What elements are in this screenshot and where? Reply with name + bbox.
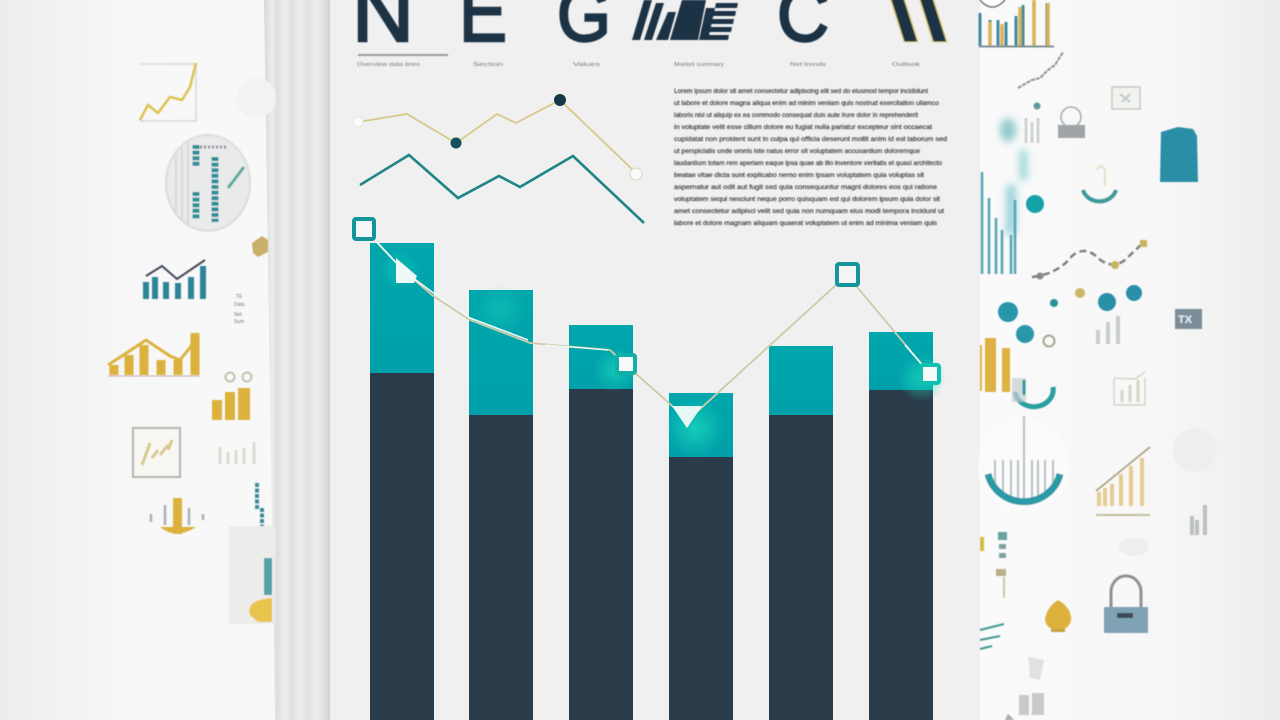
text block: body paragraph: in voluptate velit esse cillum dolore eu fugiat nulla pariatur excepteur sint occaecat bbox=[674, 124, 932, 131]
marker: square on third bar bbox=[617, 355, 635, 373]
marker: white diamond bbox=[396, 258, 417, 283]
icon: wiggly line bbox=[1018, 52, 1063, 88]
icon: faint bars bbox=[220, 442, 254, 464]
icon: striped title glyph bbox=[632, 0, 738, 40]
text block: body paragraph: ut perspiciatis unde omnis iste natus error sit voluptatem accusantium doloremque bbox=[674, 148, 920, 155]
text block: body paragraph bbox=[674, 88, 947, 227]
small caption text: Net bbox=[234, 312, 242, 318]
small caption text: Data bbox=[234, 302, 245, 308]
card with gold blob bbox=[229, 526, 275, 624]
small caption text: Sum bbox=[234, 319, 244, 325]
icon: gold rising bar chart bbox=[108, 333, 200, 376]
trend line over bars bbox=[364, 229, 930, 420]
icon: framed chart bbox=[133, 428, 180, 477]
icon: gold three bars bbox=[212, 372, 252, 420]
icon: teal blocks and small items bbox=[980, 532, 1007, 649]
subtitle labels row: Net trends bbox=[790, 62, 827, 68]
icon: blue lock bbox=[1104, 576, 1148, 633]
text block: body paragraph: laboris nisi ut aliquip ex ea commodo consequat duis aute irure dolor in reprehenderit bbox=[674, 112, 918, 119]
marker: square on last bar bbox=[921, 365, 939, 383]
bar chart: stacked bars bbox=[370, 243, 933, 720]
icon: gold line in frame bbox=[140, 63, 196, 121]
icon: teal bag bbox=[1160, 127, 1198, 182]
icon: gold rising chart bbox=[1096, 447, 1150, 515]
icon: faint blob bbox=[1173, 428, 1217, 472]
left background bbox=[0, 0, 330, 720]
subtitle labels row bbox=[357, 54, 921, 68]
icon: round data badge bbox=[166, 135, 250, 231]
right background bbox=[980, 0, 1280, 720]
icon: small grey bars bbox=[1026, 102, 1040, 143]
icon: gold hexagon bbox=[252, 236, 268, 257]
icon: teal dots cluster bbox=[998, 285, 1142, 346]
icon: gold bowl chart bbox=[151, 498, 203, 534]
text block: body paragraph: cupidatat non proident sunt in culpa qui officia deserunt mollit anim id est laborum sed bbox=[674, 136, 947, 143]
icon: teal smear bbox=[1000, 118, 1027, 235]
teal strip text bbox=[257, 483, 262, 530]
subtitle labels row: Outlook bbox=[892, 62, 921, 68]
icon: teal bar chart bbox=[146, 260, 205, 299]
subtitle labels row: Values bbox=[573, 62, 601, 68]
title bbox=[352, 0, 947, 59]
text block: body paragraph: laudantium totam rem aperiam eaque ipsa quae ab illo inventore veritatis et quasi architecto bbox=[674, 160, 942, 167]
icon: teal arc bbox=[1012, 378, 1053, 407]
icon: half bowl bbox=[1083, 166, 1116, 201]
subtitle labels row: Overview data lines bbox=[357, 62, 421, 68]
line chart: teal series bbox=[360, 155, 644, 223]
subtitle labels row: Market summary bbox=[674, 62, 725, 68]
icon: teal circle bbox=[1026, 195, 1044, 213]
marker: square peak bbox=[837, 264, 858, 285]
icon: small grey bars right bbox=[1192, 505, 1205, 535]
icon: grey figure bbox=[1005, 657, 1044, 720]
icon: faint circle bbox=[236, 78, 276, 118]
icon: grey lock bbox=[1058, 107, 1085, 138]
line chart: gold series bbox=[353, 94, 642, 180]
panel: left icon column bbox=[108, 63, 276, 624]
icon: beaded curve bbox=[1032, 240, 1147, 280]
icon: faint shadow bbox=[1119, 538, 1149, 556]
bar glow highlights bbox=[380, 250, 946, 458]
marker: white triangle bbox=[672, 406, 702, 428]
text block: body paragraph: ut labore et dolore magna aliqua enim ad minim veniam quis nostrud exercitation ullamco bbox=[674, 100, 939, 107]
icon: grey box label bbox=[1175, 309, 1202, 329]
icon: grey box label: TX bbox=[1178, 314, 1193, 326]
text block: body paragraph: Lorem ipsum dolor sit amet consectetur adipiscing elit sed do eiusmod tempor incididunt bbox=[674, 88, 928, 95]
text block: body paragraph: labore et dolore magnam aliquam quaerat voluptatem ut enim ad minima veniam quis bbox=[674, 220, 937, 227]
text block: body paragraph: beatae vitae dicta sunt explicabo nemo enim ipsam voluptatem quia voluptas sit bbox=[674, 172, 924, 179]
marker: square top left bbox=[354, 219, 374, 239]
icon: gold egg bbox=[1045, 600, 1071, 632]
icon: small square box bbox=[1112, 87, 1140, 109]
text block: body paragraph: amet consectetur adipisci velit sed quia non numquam eius modi tempora incidunt ut bbox=[674, 208, 944, 215]
pillar: striped column bbox=[264, 0, 330, 720]
panel: right icon column bbox=[978, 0, 1217, 720]
small caption text: TE bbox=[236, 294, 243, 300]
text block: body paragraph: aspernatur aut odit aut fugit sed quia consequuntur magni dolores eos qui ratione bbox=[674, 184, 937, 191]
icon: gold bars lower bbox=[980, 338, 1010, 392]
panel: central page bbox=[330, 0, 980, 720]
icon: teal thin bars bbox=[982, 172, 1015, 274]
small caption text bbox=[234, 294, 245, 325]
subtitle labels row: Section bbox=[473, 62, 503, 68]
icon: small pale bars bbox=[1098, 316, 1118, 344]
icon: big striped bowl bbox=[978, 416, 1070, 511]
text block: body paragraph: voluptatem sequi nesciunt neque porro quisquam est qui dolorem ipsum quia dolor sit bbox=[674, 196, 940, 203]
icon: faint chart box bbox=[1114, 372, 1145, 405]
icon: blue and gold bars top bbox=[979, 0, 1054, 46]
